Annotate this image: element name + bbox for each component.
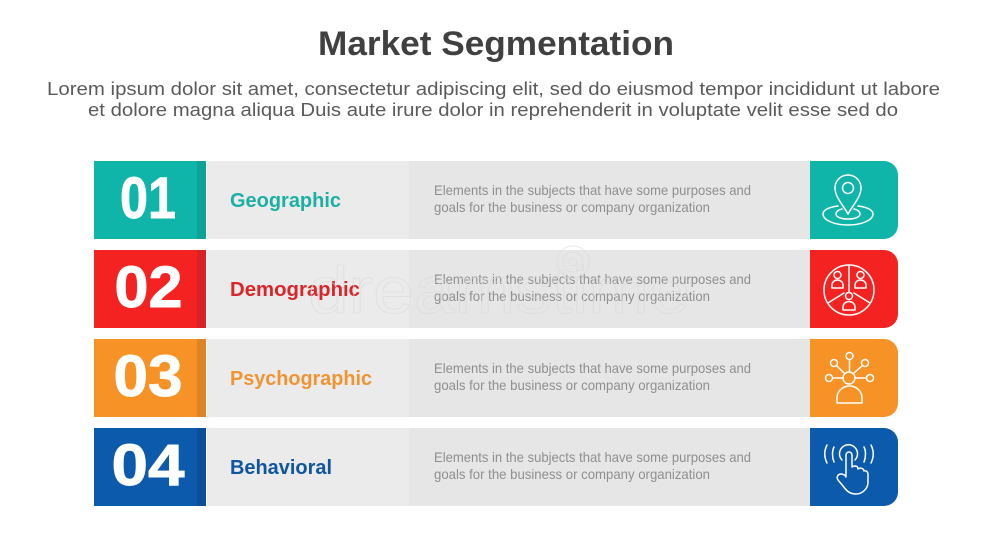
description 4: goals for the business or company organization <box>434 466 710 482</box>
icon tab 3 <box>810 339 898 417</box>
row 2: Demographic <box>94 250 898 328</box>
icon: location pin <box>823 175 873 225</box>
subtitle text: et dolore magna aliqua Duis aute irure dolor in reprehenderit in voluptate velit esse sed do <box>88 100 898 120</box>
icon tab 2 <box>810 250 898 328</box>
icon tab 4 <box>810 428 898 506</box>
row 1: Geographic <box>94 161 898 239</box>
subtitle text <box>47 79 940 120</box>
number badge 03: 03 <box>114 344 182 409</box>
description 4 <box>434 449 751 482</box>
description 3: Elements in the subjects that have some purposes and <box>434 360 751 376</box>
description 1: goals for the business or company organization <box>434 199 710 215</box>
title: Market Segmentation <box>318 25 674 63</box>
number badge 02: 02 <box>114 255 182 320</box>
watermark: dreamstime <box>308 253 690 327</box>
subtitle text: Lorem ipsum dolor sit amet, consectetur adipiscing elit, sed do eiusmod tempor incididunt ut labore <box>47 79 940 99</box>
icon: audience segments <box>824 265 874 315</box>
description 2: Elements in the subjects that have some purposes and <box>434 271 751 287</box>
description 1 <box>434 182 751 215</box>
description 3 <box>434 360 751 393</box>
label: Behavioral: Behavioral <box>230 457 332 479</box>
label: Demographic: Demographic <box>230 279 360 301</box>
icon tab 1 <box>810 161 898 239</box>
number badge 04: 04 <box>112 433 184 498</box>
description 2: goals for the business or company organization <box>434 288 710 304</box>
description 2 <box>434 271 751 304</box>
description 3: goals for the business or company organization <box>434 377 710 393</box>
label: Geographic: Geographic <box>230 190 341 212</box>
number badge 03 <box>94 339 206 417</box>
description 1: Elements in the subjects that have some purposes and <box>434 182 751 198</box>
row 4: Behavioral <box>94 428 898 506</box>
row 3: Psychographic <box>94 339 898 417</box>
number badge 01 <box>94 161 206 239</box>
number badge 01: 01 <box>120 166 176 231</box>
number badge 04 <box>94 428 206 506</box>
description 4: Elements in the subjects that have some purposes and <box>434 449 751 465</box>
icon: person with connected nodes <box>826 352 874 403</box>
number badge 02 <box>94 250 206 328</box>
icon: touch gesture hand <box>825 445 873 494</box>
label: Psychographic: Psychographic <box>230 368 372 390</box>
